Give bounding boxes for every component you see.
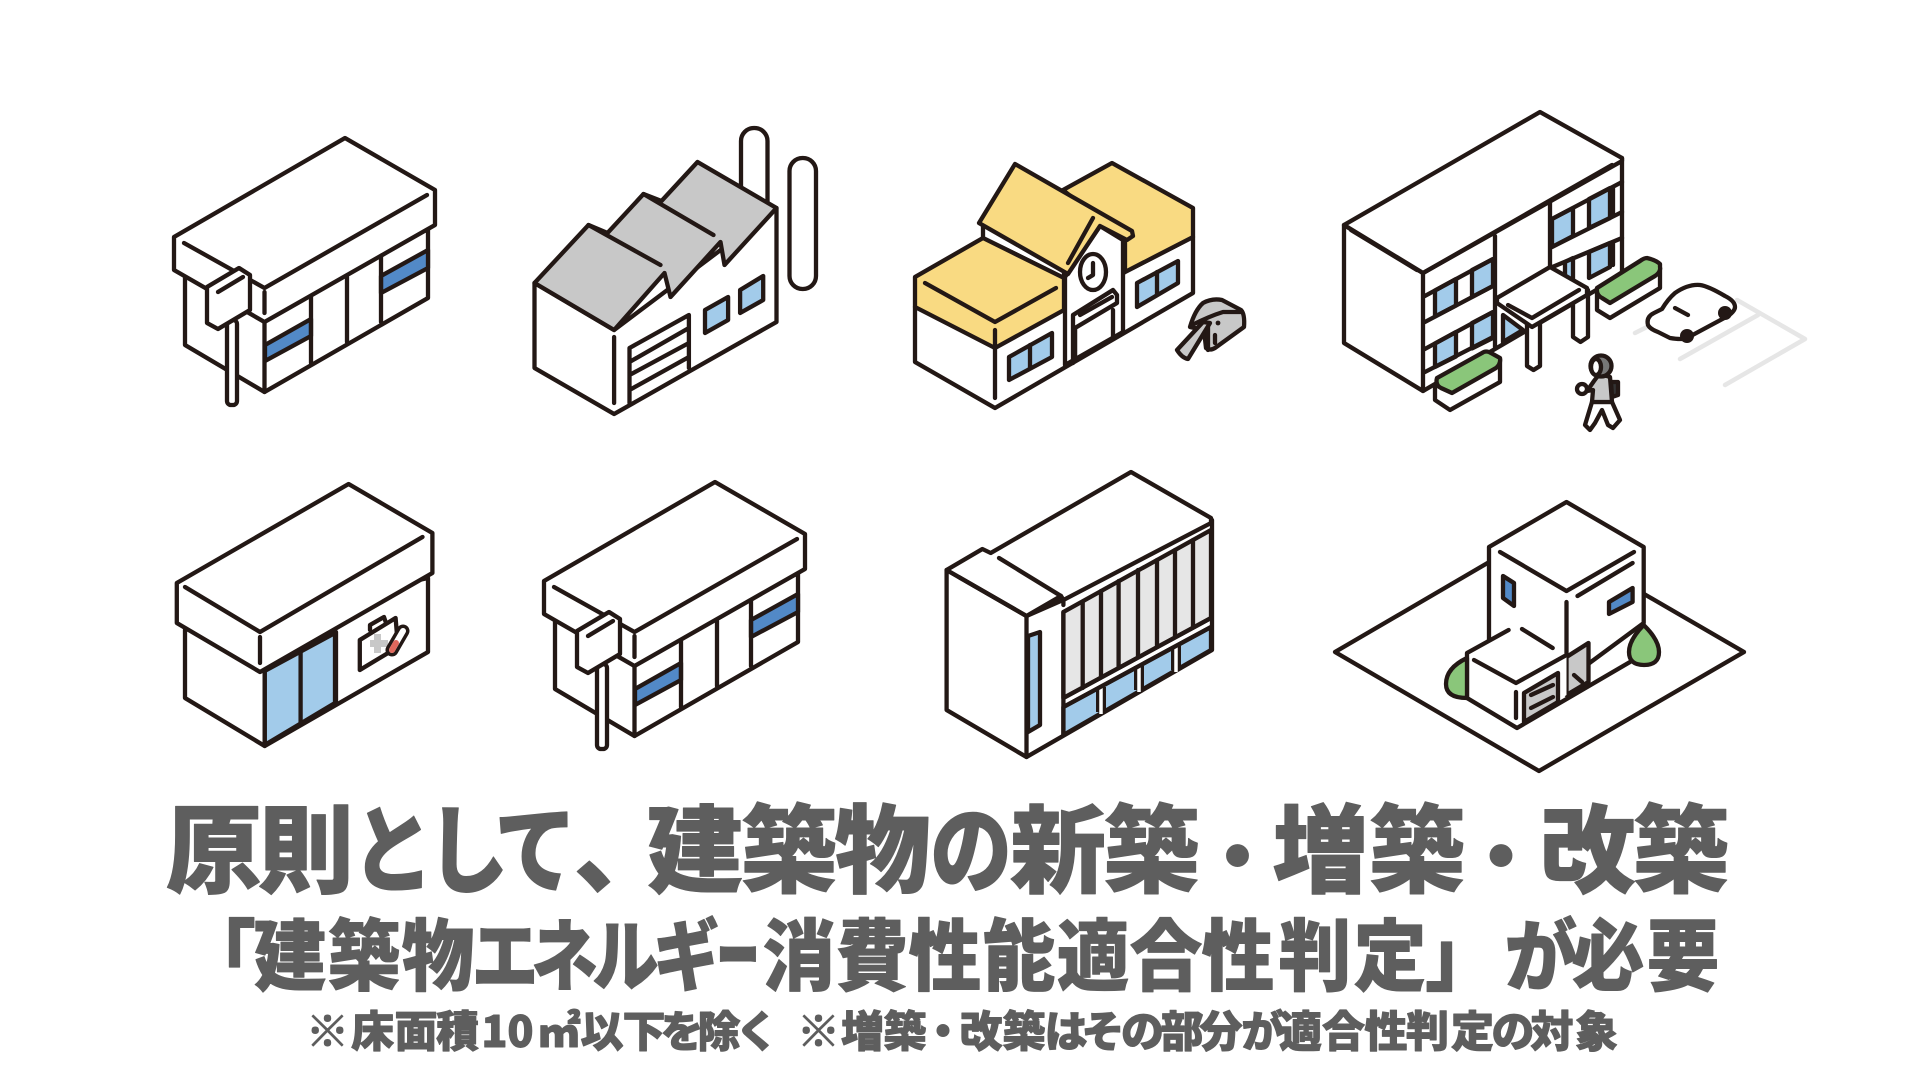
heading: line 1: 原則 [166,774,354,913]
icon: convenience store (bottom) [544,482,805,749]
heading: line 1: 、建築物 [574,774,930,913]
note: scope of extension and renovation: ※増築・改築はその部分が適合性判定の対象 [797,998,1618,1060]
heading: line 2: 「建築物 [183,894,474,1007]
heading: line 2: 消費性能適合性判定」が必要 [763,894,1719,1007]
heading: line 2: エネルギ [472,893,720,1007]
icon: office building [947,472,1212,757]
icon: car [1648,285,1735,343]
icon: apartment building [1344,112,1660,410]
icon: clinic with medical bag [177,484,432,746]
icon: elephant slide [1177,299,1244,359]
icon: parking lot lines [1635,300,1805,385]
heading: line 2 [183,893,1719,1008]
heading: line 1: 新築・増築・改築 [1010,774,1729,913]
icon: convenience store (top left) [174,138,435,405]
icon: walking person [1577,356,1620,430]
icon: detached house on lot [1335,502,1744,771]
icon: school with clock tower [915,163,1193,408]
icon: factory with chimneys [534,128,816,414]
heading: line 1 [166,774,1729,913]
heading: line 1: の [930,774,1012,913]
note: floor area exclusion: ※床面積10㎡以下を除く [306,998,778,1060]
heading: line 2: ー [717,895,759,1008]
heading: line 1: として [352,774,576,913]
